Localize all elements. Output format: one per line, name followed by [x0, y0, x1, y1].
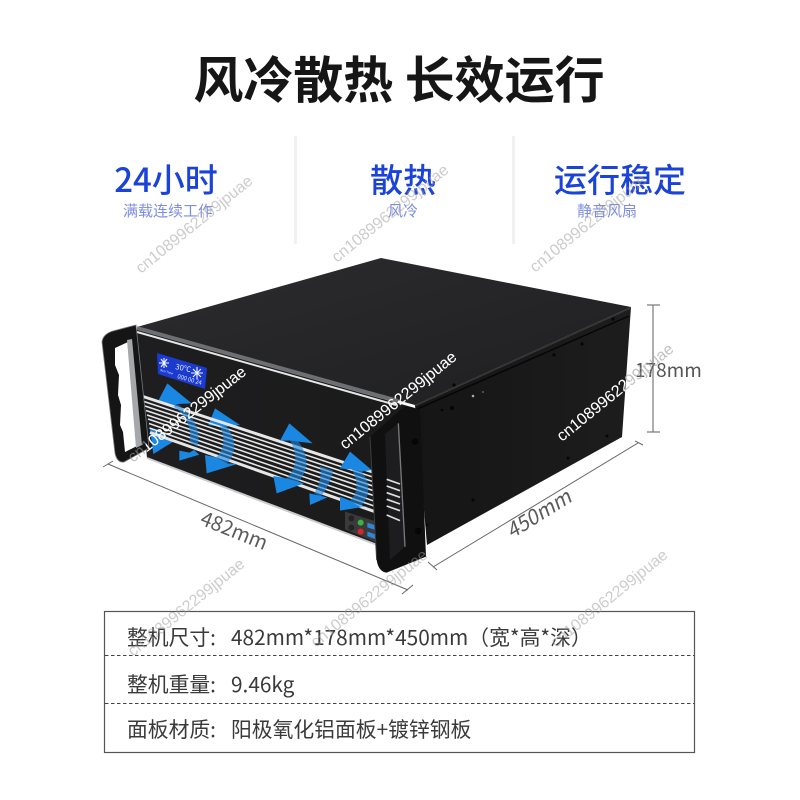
front vent stripes: [143, 396, 400, 520]
icon: blue airflow arrows: [173, 404, 372, 511]
spec row: material: 面板材质:: [127, 713, 216, 743]
seller watermark: cn1089962299jpuae: [554, 341, 677, 445]
LCD display: 000 00 24: [176, 371, 204, 387]
seller watermark: cn1089962299jpuae: [554, 341, 677, 445]
seller watermark: cn1089962299jpuae: [337, 349, 460, 453]
seller watermark: [125, 162, 677, 660]
dimension: height 178mm: [635, 305, 702, 432]
spec row: dimensions: 整机尺寸:: [127, 621, 216, 651]
dimension: width 482mm: [103, 461, 413, 594]
seller watermark: cn1089962299jpuae: [527, 172, 650, 276]
seller watermark: cn1089962299jpuae: [125, 556, 248, 660]
LCD display: 30℃: [174, 361, 193, 375]
feature: 24 hours: 满载连续工作: [123, 200, 213, 221]
seller watermark: cn1089962299jpuae: [337, 349, 460, 453]
spec row: weight: 9.46kg: [231, 668, 295, 698]
dimension: height 178mm: 178mm: [635, 356, 702, 383]
feature: cooling: 散热: [370, 154, 436, 202]
seller watermark: cn1089962299jpuae: [329, 162, 452, 266]
dimension: depth 450mm: [428, 441, 643, 570]
chassis top panel: [137, 258, 631, 405]
chassis front panel: [135, 328, 425, 548]
specification table: [104, 612, 694, 752]
chassis side panel: [415, 307, 631, 545]
dimension: width 482mm: 482mm: [197, 503, 273, 556]
LCD display: Run Time: [160, 368, 174, 376]
title: 风冷散热 长效运行: [193, 41, 605, 113]
spec row: material: 阳极氧化铝面板+镀锌钢板: [231, 713, 472, 743]
feature: stable running: 静音风扇: [577, 200, 637, 221]
LCD display: [157, 353, 207, 389]
dimension: depth 450mm: 450mm: [504, 478, 575, 545]
seller watermark: cn1089962299jpuae: [125, 363, 250, 466]
seller watermark: cn1089962299jpuae: [308, 547, 431, 651]
spec row: weight: 整机重量:: [127, 668, 216, 698]
feature: cooling: 风冷: [388, 200, 418, 221]
seller watermark: cn1089962299jpuae: [125, 363, 250, 466]
front I/O ports: [345, 512, 377, 543]
seller watermark: cn1089962299jpuae: [133, 173, 256, 277]
feature: stable running: 运行稳定: [554, 154, 686, 202]
upper airflow triangles under the vent: [150, 383, 240, 454]
seller watermark: cn1089962299jpuae: [548, 547, 671, 651]
right rack handle: [370, 406, 426, 573]
server chassis illustration: [102, 258, 631, 573]
left rack handle: [102, 325, 149, 462]
spec row: dimensions: 482mm*178mm*450mm（宽*高*深）: [231, 621, 592, 651]
feature: 24 hours: 24小时: [114, 154, 218, 202]
